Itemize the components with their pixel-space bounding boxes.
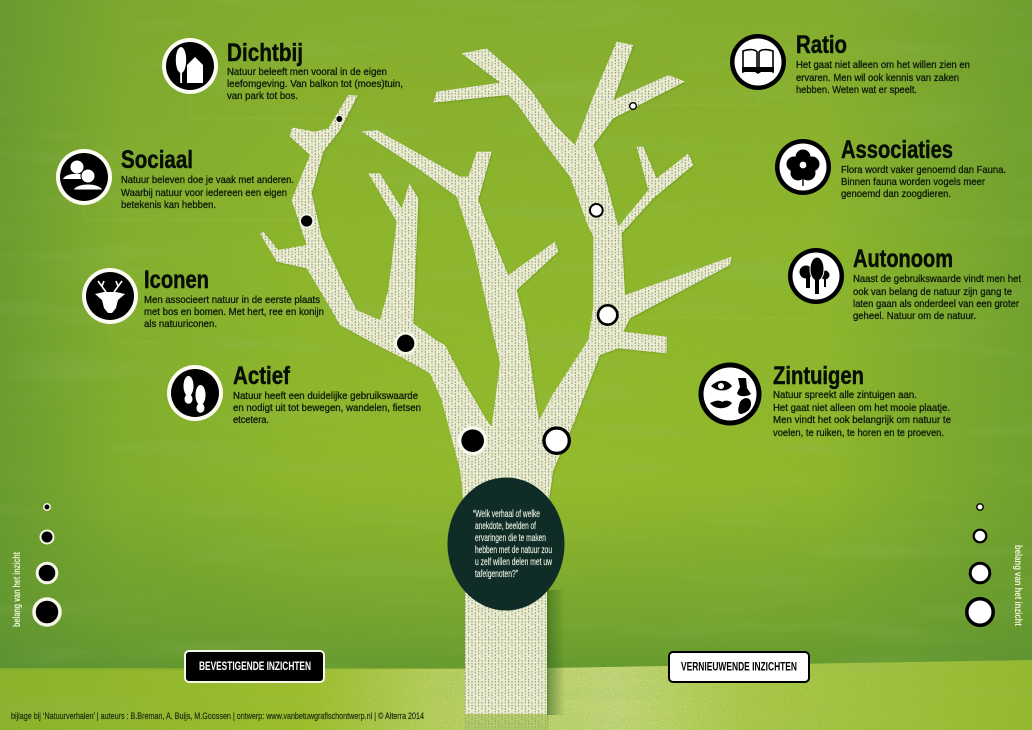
heading: Zintuigen: Zintuigen [773,362,864,390]
dot: white branch 3 [598,305,617,325]
block: Dichtbij [162,38,403,102]
button: vernieuwende inzichten [669,652,809,682]
legend: importance, new insights [967,504,1023,627]
block: Iconen [82,266,324,330]
text: Autonoom: ook van belang de natuur zijn gang te [853,287,1012,298]
trunk shadow [547,590,565,715]
quote circle: ervaringen die te maken [475,533,546,544]
text: Autonoom [853,274,1021,322]
dot: black trunk [458,426,487,455]
text: Zintuigen [773,390,951,439]
block: Ratio [730,31,970,96]
icon: footprints [167,365,223,421]
quote circle: tafelgenoten?” [475,569,518,580]
text: Dichtbij [227,67,403,102]
block: Actief [167,362,421,426]
text: Zintuigen: Het gaat niet alleen om het mooie plaatje. [773,403,950,414]
text: Associaties: Flora wordt vaker genoemd dan Fauna. [841,165,1006,176]
block: Sociaal [56,146,294,211]
text: Ratio: ervaren. Men wil ook kennis van zaken [796,73,959,84]
label: belang van het inzicht right: belang van het inzicht [1012,545,1023,627]
block: Zintuigen [698,362,951,439]
heading: Iconen: Iconen [144,266,209,294]
text: Ratio [796,60,970,96]
tree made of book pages [260,42,732,730]
text: Sociaal: Natuur beleven doe je vaak met anderen. [121,175,294,186]
text: Zintuigen: Men vindt het ook belangrijk om natuur te [773,415,951,426]
trunk base tint [465,714,547,730]
text: Associaties: genoemd dan zoogdieren. [841,189,951,200]
text: Autonoom: geheel. Natuur om de natuur. [853,311,976,322]
text: Zintuigen: Natuur spreekt alle zintuigen aan. [773,390,917,401]
text: Iconen: als natuuriconen. [144,319,217,330]
text: Zintuigen: voelen, te ruiken, te horen en te proeven. [773,428,944,439]
text: Sociaal [121,175,294,211]
dot: white small branch [630,103,636,109]
heading: Autonoom: Autonoom [853,245,953,273]
quote circle: “Welk verhaal of welke [473,509,540,520]
heading: Ratio: Ratio [796,31,847,59]
text: Iconen: met bos en bomen. Met hert, ree en konijn [144,307,324,318]
dot: white trunk [544,428,569,453]
label: belang van het inzicht left: belang van het inzicht [12,552,23,627]
button: bevestigende inzichten [185,651,324,682]
icon: eye, nose, mouth, ear [698,362,762,426]
block: Associaties [775,136,1006,200]
text: Dichtbij: van park tot bos. [227,91,298,102]
heading: Actief: Actief [233,362,291,390]
quote circle: anekdote, beelden of [475,521,536,532]
text: Dichtbij: leefomgeving. Van balkon tot (moes)tuin, [227,79,403,90]
text: Associaties: Binnen fauna worden vogels meer [841,177,985,188]
text: Autonoom: Naast de gebruikswaarde vindt men het [853,274,1021,285]
text: Actief: etcetera. [233,415,269,426]
heading: Dichtbij: Dichtbij [227,39,303,67]
text: Actief: en nodigt uit tot bewegen, wandelen, fietsen [233,403,421,414]
icon: two people [56,149,112,205]
text: Ratio: hebben. Weten wat er speelt. [796,85,917,96]
button: vernieuwende inzichten: VERNIEUWENDE INZICHTEN [681,660,797,674]
icon: three trees [788,248,844,304]
quote circle: hebben met de natuur zou [475,545,552,556]
icon: deer head [82,268,138,324]
heading: Associaties: Associaties [841,136,953,164]
text: Ratio: Het gaat niet alleen om het willen zien en [796,60,970,71]
icon: flower [775,139,831,195]
icon: open book [730,34,786,90]
text: Associaties [841,165,1006,200]
dot: black branch 2 [299,214,314,228]
text: Actief: Natuur heeft een duidelijke gebruikswaarde [233,391,418,402]
dot: white branch 2 [590,204,603,217]
quote circle [448,478,564,610]
block: Autonoom [788,245,1021,322]
footer credits: bijlage bij ‘Natuurverhalen’ | auteurs : B.Breman, A. Buijs, M.Goossen | ontwerp: www.vanbetuwgrafischontwerp.nl | © Alterra 2014 [11,711,424,721]
button: bevestigende inzichten: BEVESTIGENDE INZICHTEN [199,659,311,673]
text: Dichtbij: Natuur beleeft men vooral in de eigen [227,67,387,78]
text: Sociaal: Waarbij natuur voor iedereen een eigen [121,188,287,199]
quote circle: u zelf willen delen met uw [475,557,553,568]
heading: Sociaal: Sociaal [121,146,193,174]
text: Iconen: Men associeert natuur in de eerste plaats [144,295,320,306]
text: Autonoom: laten gaan als onderdeel van een groter [853,299,1019,310]
dot: black small branch [335,115,343,123]
icon: tree and house [162,38,218,94]
dot: black branch 3 [394,332,417,355]
text: Sociaal: betekenis kan hebben. [121,200,216,211]
text: Actief [233,391,421,426]
legend: importance, confirming insights [12,504,60,627]
text: Iconen [144,295,324,330]
